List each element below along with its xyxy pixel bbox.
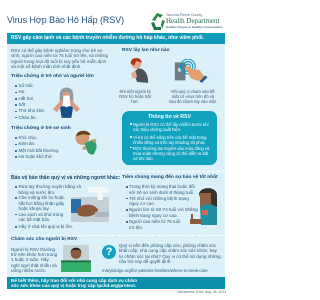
banner: RSV gây cảm lạnh và các bệnh truyền nhiễm đường hô hấp khác, như viêm phổi. xyxy=(11,35,204,41)
care text: Người bị RSV thường xyxy=(11,246,55,252)
care text xyxy=(11,246,57,273)
icon: question mark xyxy=(102,245,116,259)
list: protection: Che miệng khi ho hoặc xyxy=(18,195,65,200)
care text: trở nên khỏe hơn trong xyxy=(11,252,57,257)
icon: person resting in bed xyxy=(61,245,91,272)
icon: person vaccinated xyxy=(190,188,217,225)
logo text: Healthy People in Healthy Communities xyxy=(166,25,223,29)
url: marybridge.org/for-patients-families/where-to-seek-care xyxy=(102,268,208,272)
logo text: Health Department xyxy=(166,17,219,25)
panel: RSV facts xyxy=(122,111,217,165)
heading: vaccination: Tiêm chủng mang đến sự bảo vệ tốt nhất xyxy=(122,175,218,180)
list: symptoms in children and adults: Chán ăn. xyxy=(18,114,37,120)
list: symptoms in children and adults xyxy=(15,83,45,120)
revision note: Vietnamese | Rev. Aug. 28, 2023 xyxy=(177,290,226,294)
list: vaccination: Trong thời kỳ mang thai hoặc đối xyxy=(129,184,195,189)
facts list: Người bị RSV có thể lây nhiễm trước khi xyxy=(133,122,209,126)
caption: coughing: Khi một người bị xyxy=(120,88,150,94)
list: protection xyxy=(15,184,81,229)
list: protection: bông và nước ấm. xyxy=(18,190,55,195)
icon: hand washing xyxy=(71,187,109,222)
list: vaccination: nguy cơ cao. xyxy=(129,201,155,206)
icon: question mark: ? xyxy=(106,246,112,258)
logo text xyxy=(166,13,223,29)
intro text: và một số bệnh mãn tính nhất định. xyxy=(11,64,82,69)
where to seek care text: Quý vị nên đến phòng cấp cứu, phòng chăm sóc xyxy=(119,242,216,248)
divider xyxy=(7,235,225,236)
intro text xyxy=(11,48,108,69)
list: vaccination: với trẻ sơ sinh dưới 8 tháng tuổi. xyxy=(129,190,194,195)
facts list: RSV thường lan truyền vào mùa đông và xyxy=(133,146,209,150)
facts heading: Thông tin về RSV xyxy=(148,114,191,120)
caption: touching xyxy=(169,88,217,104)
facts list: nhiều tiếng và trên tay khoảng 30 phút. xyxy=(133,140,205,145)
footer banner xyxy=(7,277,225,289)
where to seek care text: tự chăm sóc tại nhà? Quý vị có thể sử dụng những xyxy=(119,254,221,259)
icon: person coughing xyxy=(130,58,148,83)
footer banner: Để biết thêm, hãy trao đổi với nhà cung cấp dịch vụ chăm xyxy=(11,278,137,282)
facts list: mùa xuân nhưng cũng có thể diễn ra bất xyxy=(133,151,208,156)
caption: coughing xyxy=(119,88,151,104)
caption: touching: sau đó chạm tay vào mặt. xyxy=(169,99,217,104)
caption: coughing: RSV ho hoặc hắt xyxy=(119,94,151,99)
list: vaccination xyxy=(126,184,198,230)
icon: infant xyxy=(76,130,97,155)
list: vaccination: Người lớn từ 50-74 tuổi với những xyxy=(129,207,198,212)
list: protection: các bề mặt bẩn. xyxy=(18,217,51,222)
facts list: các triệu chứng xuất hiện. xyxy=(133,127,181,132)
list: vaccination: bệnh trạng nguy cơ cao. xyxy=(129,213,178,218)
intro text: RSV có thể gây bệnh nghiêm trọng cho trẻ sơ xyxy=(11,48,103,52)
icon: person sneezing xyxy=(53,88,80,118)
list: symptoms in infants xyxy=(15,135,59,159)
list: protection: hoặc khuỷu tay. xyxy=(18,206,50,211)
logo: health department xyxy=(151,13,223,30)
heading: protect yourself: Bảo vệ bản thân quý vị và những người khác: xyxy=(11,175,120,181)
list: protection: Hãy ở nhà khi quý vị bị ốm. xyxy=(18,224,73,229)
intro text: người trong mọi độ tuổi bị suy yếu hệ miễn dịch xyxy=(11,58,106,64)
caption: touching: Khi quý vị chạm vào bề xyxy=(171,88,215,94)
facts list: Vi-rút có thể sống trên các bề mặt trong xyxy=(133,134,206,140)
list: vaccination: Trẻ nhỏ với những bệnh trạng xyxy=(129,196,189,200)
footer banner: sóc sức khỏe của quý vị hoặc truy cập tpchd.org/protect. xyxy=(11,283,136,288)
list: vaccination: Người cao niên từ 75 tuổi xyxy=(129,219,180,224)
list: protection: Lau sạch và khử trùng xyxy=(18,212,63,216)
list: symptoms in infants: Khó chịu. xyxy=(18,135,37,140)
panel: main background xyxy=(7,43,225,277)
list: symptoms in children and adults: Sổ mũi. xyxy=(18,83,34,88)
care text: uống nhiều nước. xyxy=(11,268,46,273)
heading: care for RSV patients: Chăm sóc cho người bị RSV xyxy=(11,237,77,242)
care text: 1 hoặc 2 tuần. Hãy xyxy=(11,257,49,262)
list: vaccination: trở lên. xyxy=(129,225,143,230)
facts list: cứ khi nào. xyxy=(133,156,154,161)
list: symptoms in infants: Ho hoặc khó thở. xyxy=(18,154,53,159)
logo text: Tacoma-Pierce County xyxy=(166,13,202,17)
care text: nghỉ ngơi thật nhiều và xyxy=(11,263,57,268)
caption: coughing: hơi. xyxy=(131,99,139,104)
facts list xyxy=(130,122,210,161)
list: symptoms in children and adults: Ho. xyxy=(18,89,26,94)
heading: symptoms in infants: Triệu chứng ở trẻ sơ sinh xyxy=(11,126,71,131)
title: Virus Hợp Bào Hô Hấp (RSV) xyxy=(7,15,124,25)
where to seek care text: khẩn cấp, nhà cung cấp chăm sóc sức khỏe, hay xyxy=(119,248,217,253)
list: symptoms in children and adults: Hắt hơi. xyxy=(18,96,34,101)
logo mark xyxy=(151,13,165,30)
list: symptoms in children and adults: Sốt. xyxy=(18,102,27,107)
list: symptoms in children and adults: Thở khò khè. xyxy=(18,108,45,113)
intro text: sinh, người cao niên từ 75 tuổi trở lên, và những xyxy=(11,53,108,58)
heading: symptoms in children and adults: Triệu chứng ở trẻ nhỏ và người lớn xyxy=(11,74,94,79)
right heading: how RSV spreads: RSV lây lan như nào xyxy=(122,48,170,53)
icon: hand touching surface xyxy=(174,59,208,83)
list: symptoms in infants: Kém ăn. xyxy=(18,141,35,146)
caption: touching: mặt có virus trên đó và xyxy=(172,94,214,99)
list: protection: Rửa tay thường xuyên bằng xà xyxy=(18,184,81,189)
list: symptoms in infants: Mệt mỏi bất thường. xyxy=(18,148,59,153)
divider xyxy=(7,171,225,172)
where to seek care text: câu hỏi này để quyết định: xyxy=(119,259,172,264)
banner xyxy=(7,33,225,44)
list: protection: hắt hơi bằng khăn giấy xyxy=(18,201,64,206)
where to seek care text xyxy=(119,242,221,264)
